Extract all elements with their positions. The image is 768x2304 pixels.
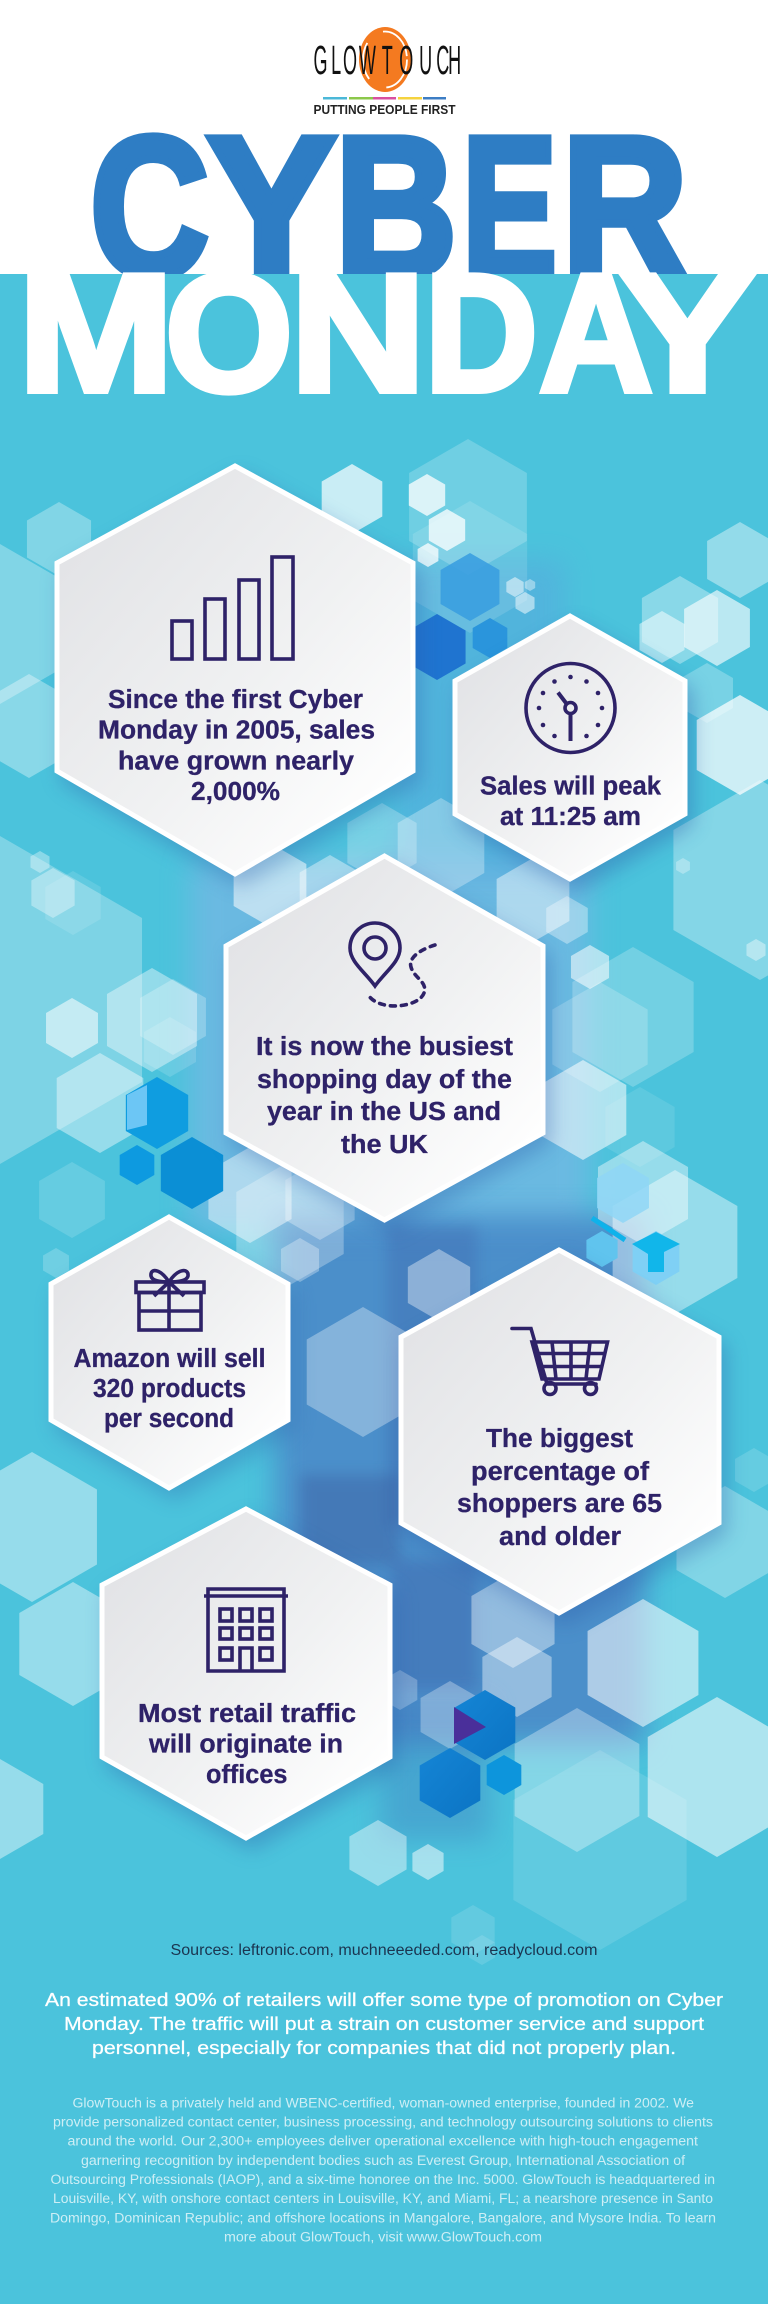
title: MONDAY: M <box>18 239 174 427</box>
title: CYBER: C <box>90 96 209 319</box>
text: offices: will originate in <box>148 1730 343 1758</box>
text: peak time: Sales will peak <box>480 772 662 800</box>
panel: shoppers <box>401 1250 727 1626</box>
text: offices: Most retail traffic <box>138 1700 356 1728</box>
text: offices: offices <box>206 1761 288 1789</box>
title: MONDAY: D <box>424 239 538 427</box>
text block: promotion summary: Monday. The traffic will put a strain on customer service and support <box>64 2013 704 2034</box>
logo wordmark: GLOWTOUCH <box>314 36 461 83</box>
icon: office building <box>204 1589 288 1671</box>
text block: about GlowTouch: Domingo, Dominican Republic; and offshore locations in Mangalore, Bangalore, and Mysore India. To learn <box>50 2211 716 2226</box>
text: Amazon: 320 products <box>93 1375 246 1403</box>
icon: gift <box>136 1271 204 1330</box>
title: MONDAY: Y <box>620 239 755 427</box>
text block: about GlowTouch: garnering recognition by independent bodies such as Everest Group, International Association of <box>81 2153 685 2168</box>
icon: clock <box>526 664 615 752</box>
text: sales growth: Since the first Cyber <box>108 686 363 714</box>
text: Amazon: Amazon will sell <box>74 1345 266 1373</box>
text: busiest day: the UK <box>341 1131 429 1159</box>
title: MONDAY <box>18 239 755 427</box>
text block: about GlowTouch <box>50 2095 716 2245</box>
title: MONDAY: O <box>165 239 293 427</box>
title: MONDAY: A <box>539 239 653 427</box>
text: Amazon <box>74 1345 266 1433</box>
text block: promotion summary: personnel, especially for companies that did not properly plan. <box>92 2037 676 2058</box>
icon: bar chart <box>172 557 293 659</box>
logo tagline: PUTTING PEOPLE FIRST <box>314 102 456 117</box>
title: MONDAY: N <box>290 239 426 427</box>
text: Amazon: per second <box>104 1405 234 1433</box>
text block: about GlowTouch: more about GlowTouch, visit www.GlowTouch.com <box>224 2230 542 2245</box>
title: CYBER: Y <box>207 96 336 319</box>
text: peak time <box>480 772 662 831</box>
text: shoppers: shoppers are 65 <box>457 1490 662 1518</box>
text: busiest day <box>256 1033 514 1159</box>
text: shoppers: percentage of <box>471 1458 650 1486</box>
text: busiest day: year in the US and <box>267 1098 501 1126</box>
title: CYBER: E <box>462 96 557 319</box>
logo orange circle <box>359 27 411 92</box>
text block: about GlowTouch: around the world. Our 2,300+ employees deliver operational excellence with high-touch engagement <box>68 2134 698 2149</box>
text: shoppers: The biggest <box>486 1425 634 1453</box>
text: offices <box>138 1700 356 1789</box>
text block: about GlowTouch: GlowTouch is a privately held and WBENC-certified, woman-owned enterprise, founded in 2002. We <box>72 2095 694 2110</box>
text: sales growth: have grown nearly <box>118 748 355 776</box>
icon: shopping cart <box>512 1328 608 1394</box>
panel: Amazon <box>51 1217 296 1501</box>
sources: Sources: leftronic.com, muchneeeded.com, readycloud.com <box>170 1942 598 1959</box>
text block: promotion summary <box>45 1989 723 2058</box>
text block: about GlowTouch: Outsourcing Professionals (IAOP), and a six-time honoree on the Inc. 5000. GlowTouch is headquartered in <box>50 2172 715 2187</box>
panel: peak time <box>455 616 693 892</box>
text: sales growth: Monday in 2005, sales <box>98 716 375 744</box>
text: peak time: at 11:25 am <box>500 803 641 831</box>
text block: promotion summary: An estimated 90% of retailers will offer some type of promotion on Cyber <box>45 1989 723 2010</box>
logo: GlowTouch <box>314 27 461 117</box>
text: sales growth: 2,000% <box>191 778 280 806</box>
text block: about GlowTouch: provide personalized contact center, business processing, and technology outsourcing solutions to clients <box>53 2115 713 2130</box>
text: sales growth <box>98 686 375 806</box>
text: busiest day: shopping day of the <box>257 1066 512 1094</box>
text: busiest day: It is now the busiest <box>256 1033 514 1061</box>
panel: offices <box>102 1509 398 1851</box>
icon: location pin <box>350 923 435 1006</box>
panel: sales growth <box>57 466 421 887</box>
text: shoppers: and older <box>499 1523 621 1551</box>
text block: about GlowTouch: Louisville, KY, with onshore contact centers in Louisville, KY, and Miami, FL; a nearshore presence in Santo <box>53 2191 713 2206</box>
panel: busiest day <box>226 856 551 1233</box>
title: CYBER: B <box>335 96 457 319</box>
title: CYBER: R <box>562 96 688 319</box>
title: CYBER <box>93 132 688 274</box>
text: shoppers <box>457 1425 662 1551</box>
